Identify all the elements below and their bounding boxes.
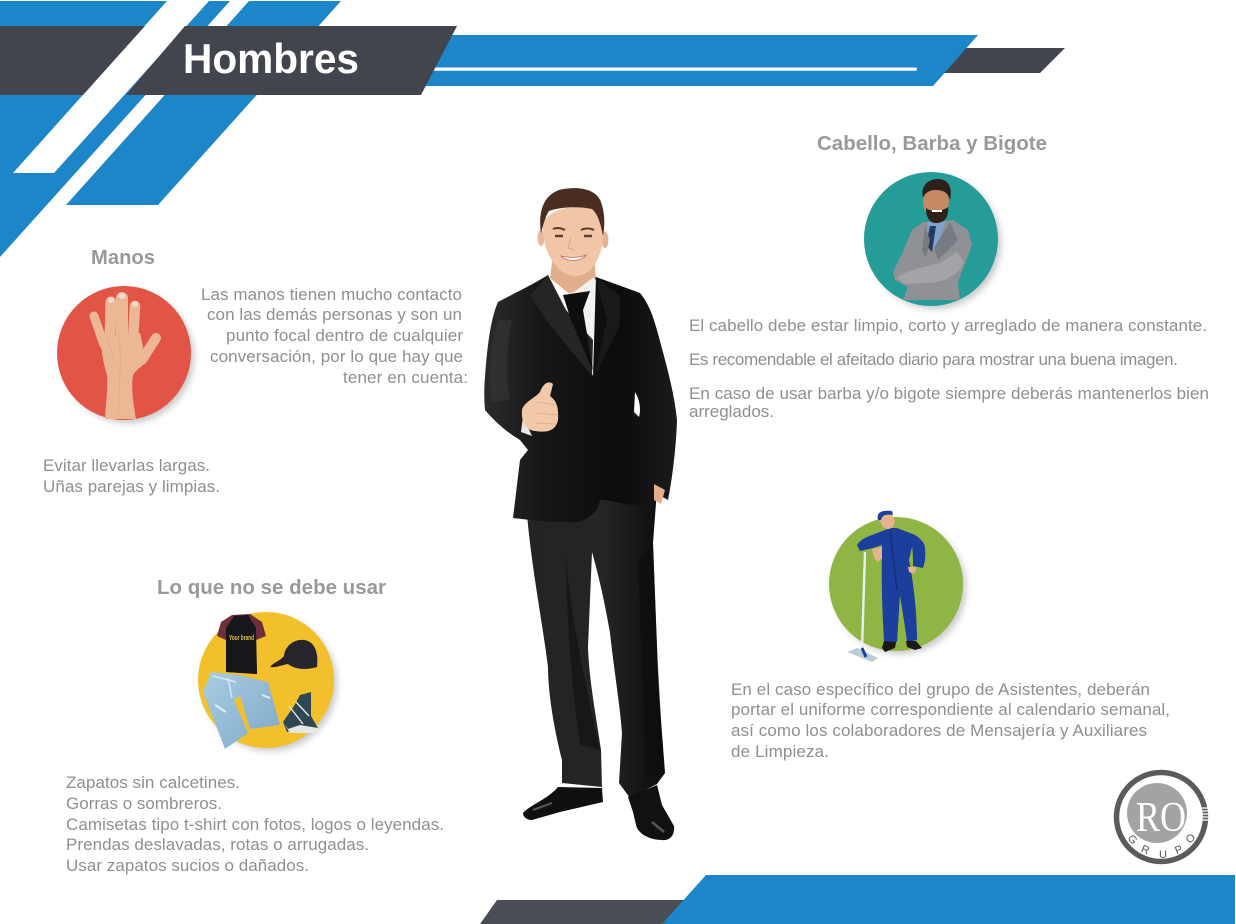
- header: right blue bar with white line: [425, 35, 1065, 86]
- text block: assistants uniform: portar el uniforme correspondiente al calendario semanal,: [731, 700, 1170, 719]
- boots: [882, 641, 922, 652]
- text block: prohibited items list: [66, 773, 444, 875]
- text block: prohibited items list: Zapatos sin calcetines.: [66, 773, 240, 792]
- head: [922, 179, 951, 223]
- logo: Grupo RO: P: [1173, 843, 1185, 857]
- text block: hair and beard rules: [689, 316, 1209, 421]
- text block: assistants uniform: En el caso específico del grupo de Asistentes, deberán: [731, 680, 1150, 699]
- text block: manos intro: punto focal dentro de cualquier: [226, 326, 463, 345]
- text block: prohibited items list: Camisetas tipo t-shirt con fotos, logos o leyendas.: [66, 815, 444, 834]
- head: [538, 188, 608, 276]
- jacket: [484, 275, 677, 522]
- tie: [563, 291, 593, 370]
- text block: assistants uniform: [731, 680, 1170, 761]
- logo: Grupo RO: O: [1184, 831, 1198, 846]
- logo: Grupo RO: R: [1139, 843, 1151, 857]
- heading: Manos: Manos: [91, 246, 155, 269]
- title: Hombres: [183, 35, 359, 82]
- right shoe: [628, 785, 674, 840]
- sneakers: [283, 692, 318, 733]
- suit: [893, 220, 972, 300]
- sleeve highlights: [490, 320, 512, 402]
- jeans: [203, 672, 280, 749]
- icon: uniformed worker on green circle: [829, 511, 966, 662]
- header: blue diagonal shapes: [0, 1, 341, 257]
- text block: hair and beard rules: arreglados.: [689, 402, 774, 421]
- text block: hair and beard rules: El cabello debe estar limpio, corto y arreglado de manera constante.: [689, 316, 1207, 335]
- icon: hand on red circle: [57, 286, 194, 423]
- text block: prohibited items list: Prendas deslavadas, rotas o arrugadas.: [66, 835, 369, 854]
- coverall: [857, 528, 925, 642]
- text block: hair and beard rules: Es recomendable el afeitado diario para mostrar una buena imagen.: [689, 350, 1178, 369]
- header: dark title band: [0, 26, 457, 95]
- arm gap: [634, 392, 640, 417]
- t-shirt: Your brand: [229, 635, 254, 642]
- heading: Cabello, Barba y Bigote: Cabello, Barba y Bigote: [817, 132, 1047, 155]
- logo: Grupo RO: [1116, 772, 1211, 862]
- text block: manos list: Evitar llevarlas largas.: [43, 456, 210, 475]
- hand: [521, 382, 558, 436]
- cap: [270, 640, 317, 669]
- logo: Grupo RO: U: [1159, 849, 1167, 861]
- lapels: [530, 275, 620, 378]
- icon: clothes on yellow circle: [198, 612, 337, 751]
- text block: manos intro: con las demás personas y son un: [207, 305, 462, 324]
- text block: manos intro: tener en cuenta:: [343, 368, 468, 387]
- heading: Lo que no se debe usar: Lo que no se debe usar: [157, 576, 386, 599]
- text block: assistants uniform: de Limpieza.: [731, 742, 829, 761]
- logo: Grupo RO: G: [1125, 833, 1139, 847]
- footer: dark and blue bars: [480, 875, 1235, 924]
- logo: Grupo RO: RO: [1136, 795, 1186, 841]
- text block: manos intro: [201, 285, 468, 387]
- mop: [847, 552, 878, 662]
- text block: manos intro: Las manos tienen mucho contacto: [201, 285, 462, 304]
- text block: prohibited items list: Gorras o sombreros.: [66, 794, 222, 813]
- pants: [527, 490, 665, 798]
- head and hands: [872, 511, 917, 574]
- text block: assistants uniform: así como los colaboradores de Mensajería y Auxiliares: [731, 721, 1147, 740]
- text block: manos intro: conversación, por lo que hay que: [210, 347, 463, 366]
- left shoe: [523, 787, 603, 820]
- central figure: man in black suit: [484, 188, 677, 840]
- pocket hand: [654, 484, 665, 504]
- text block: hair and beard rules: En caso de usar barba y/o bigote siempre deberás mantenerlos bien: [689, 384, 1209, 403]
- neck: [550, 255, 596, 296]
- text block: manos list: [43, 456, 220, 496]
- shirt: [547, 277, 607, 378]
- icon: bearded man on teal circle: [864, 172, 1001, 309]
- text block: prohibited items list: Usar zapatos sucios o dañados.: [66, 856, 309, 875]
- text block: manos list: Uñas parejas y limpias.: [43, 477, 220, 496]
